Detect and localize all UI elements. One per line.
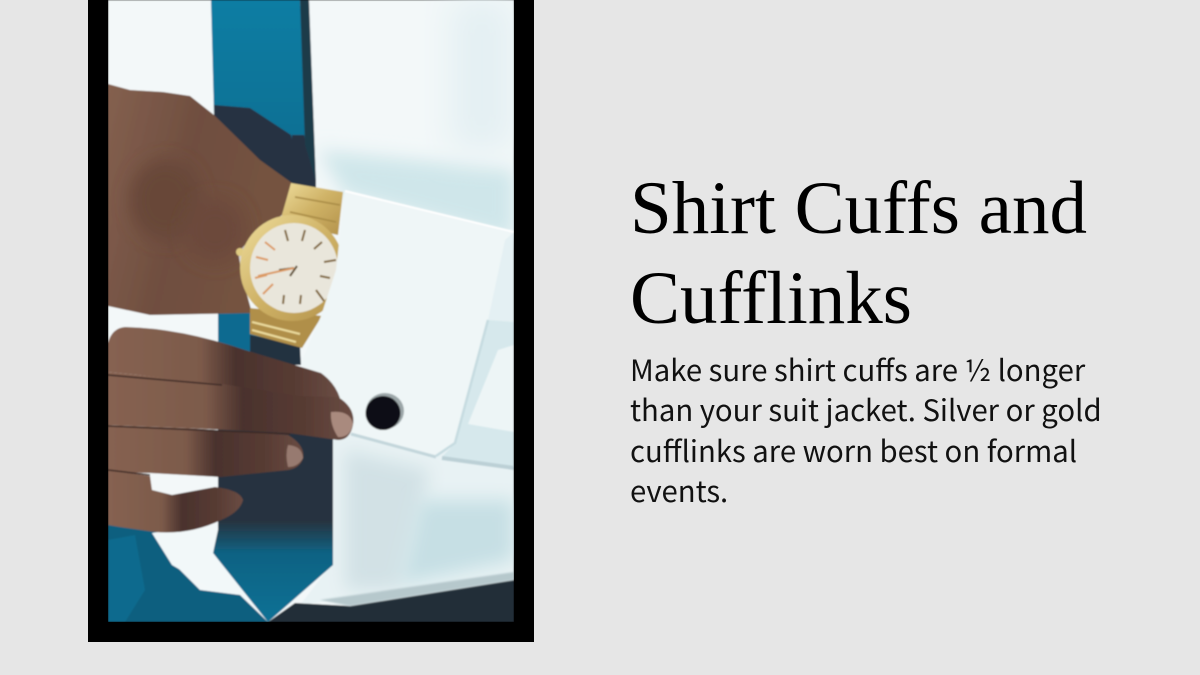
cufflink	[366, 393, 404, 430]
title: Cufflinks	[630, 257, 912, 340]
shirt cuff	[301, 191, 514, 468]
jacket and vest at bottom	[108, 524, 269, 622]
watch dial	[250, 223, 338, 313]
watch band upper	[280, 183, 343, 235]
watch case	[236, 248, 244, 256]
tie between wrist and fingers	[217, 312, 264, 352]
forearm and hand	[108, 84, 292, 315]
tie upper	[211, 0, 316, 200]
body text: events.	[630, 469, 728, 511]
tie lower	[213, 420, 333, 622]
shirt below cuff	[300, 430, 514, 605]
shirt	[108, 0, 514, 622]
watch band lower	[250, 308, 322, 348]
fingers	[108, 327, 353, 532]
body text: than your suit jacket. Silver or gold	[630, 388, 1102, 430]
title	[630, 167, 1087, 340]
photo frame: black border with wrist, watch and cufflink photo	[88, 0, 534, 642]
body text: cufflinks are worn best on formal	[630, 429, 1077, 471]
shirt hem strip	[320, 572, 514, 606]
body text: Make sure shirt cuffs are ½ longer	[630, 348, 1085, 390]
body text	[630, 348, 1102, 511]
black border	[88, 0, 534, 642]
title: Shirt Cuffs and	[630, 167, 1087, 250]
